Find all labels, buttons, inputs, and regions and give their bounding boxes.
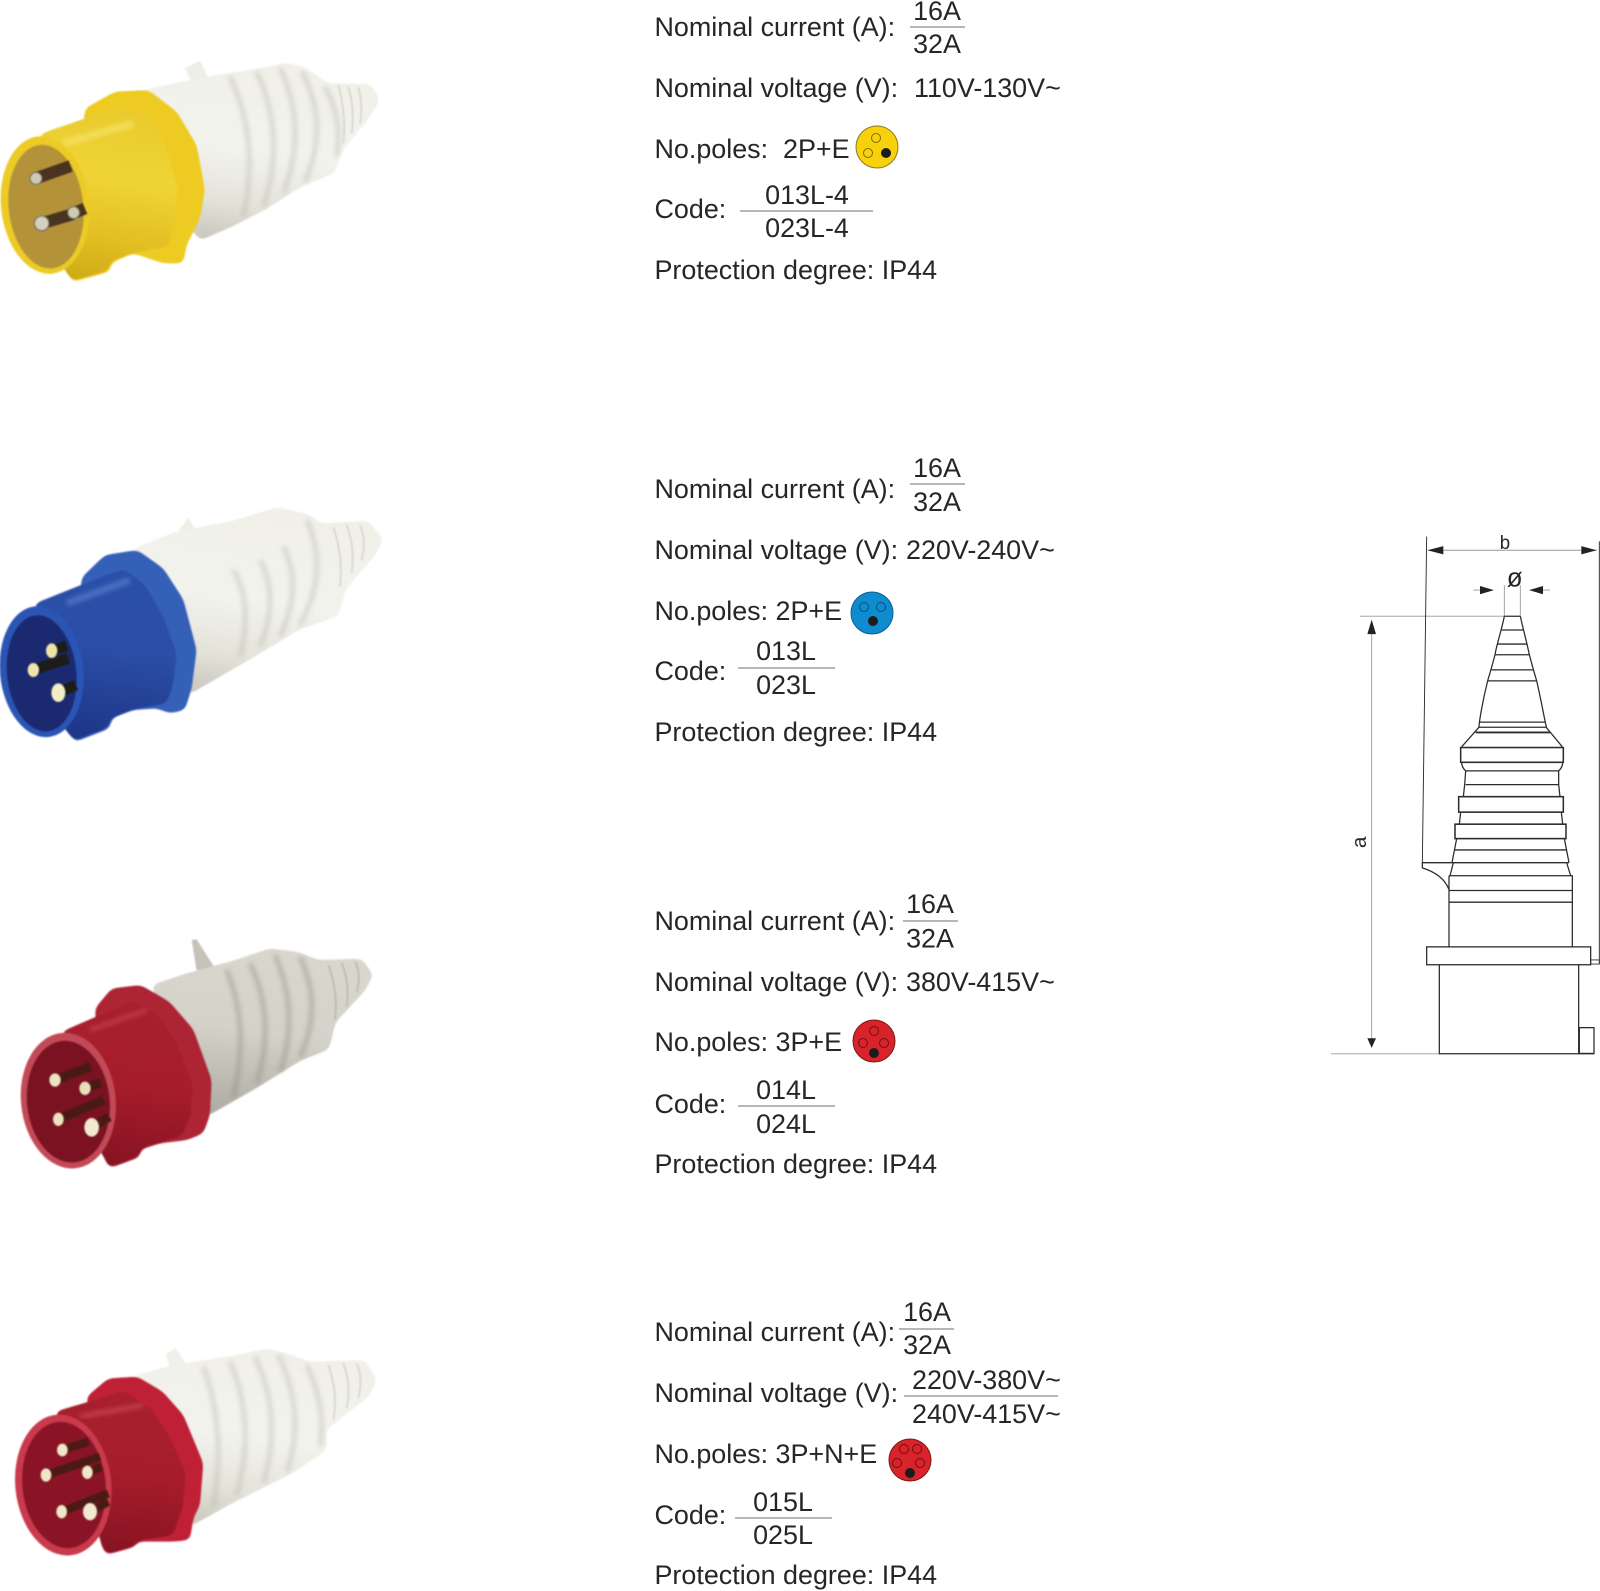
spec block: red 3P+E plug bbox=[654, 889, 1055, 1179]
spec block: blue plug: 023L bbox=[756, 670, 816, 700]
spec block: red 3P+N+E plug: 240V-415V~ bbox=[912, 1399, 1061, 1429]
spec block: blue plug: 2P+E bbox=[776, 596, 842, 626]
spec block: red 3P+N+E plug: 16A bbox=[903, 1297, 951, 1327]
spec block: blue plug: Protection degree: IP44 bbox=[654, 717, 937, 747]
spec block: red 3P+E plug: Code: bbox=[654, 1089, 726, 1119]
spec block: red 3P+N+E plug: Nominal current (A): bbox=[654, 1317, 895, 1347]
icon: yellow socket pin layout bbox=[856, 126, 898, 168]
spec block: yellow plug: Code: bbox=[654, 194, 726, 224]
spec block: yellow plug: Nominal current (A): bbox=[654, 12, 895, 42]
dimension labels: ø bbox=[1507, 562, 1523, 593]
spec block: blue plug: Nominal voltage (V): bbox=[654, 535, 898, 565]
spec block: yellow plug: No.poles: bbox=[654, 134, 768, 164]
plug outline bbox=[1422, 616, 1599, 1054]
photo: yellow plug bbox=[0, 61, 380, 282]
spec block: yellow plug: Nominal voltage (V): bbox=[654, 73, 898, 103]
spec block: blue plug: No.poles: bbox=[654, 596, 768, 626]
photo: red 3P+E plug bbox=[14, 939, 373, 1173]
spec block: red 3P+E plug: 014L bbox=[756, 1075, 816, 1105]
icon: red 3P+E socket pin layout bbox=[853, 1020, 895, 1062]
icon: blue socket pin layout bbox=[851, 592, 893, 634]
spec block: red 3P+E plug: 3P+E bbox=[776, 1027, 842, 1057]
dimension labels: a bbox=[1349, 836, 1371, 848]
spec block: red 3P+E plug: Nominal voltage (V): bbox=[654, 967, 898, 997]
spec block: red 3P+N+E plug: 025L bbox=[753, 1520, 813, 1550]
spec block: blue plug bbox=[654, 453, 1055, 747]
technical dimension drawing bbox=[1331, 533, 1599, 1054]
spec block: red 3P+E plug: 380V-415V~ bbox=[906, 967, 1055, 997]
spec block: red 3P+E plug: Nominal current (A): bbox=[654, 906, 895, 936]
spec block: red 3P+N+E plug: Protection degree: IP44 bbox=[654, 1560, 937, 1590]
spec block: red 3P+N+E plug: Nominal voltage (V): bbox=[654, 1378, 898, 1408]
spec block: blue plug: Code: bbox=[654, 656, 726, 686]
spec block: red 3P+N+E plug: No.poles: bbox=[654, 1439, 768, 1469]
spec block: yellow plug: 32A bbox=[913, 29, 961, 59]
spec block: yellow plug: 023L-4 bbox=[765, 213, 849, 243]
spec block: blue plug: 013L bbox=[756, 636, 816, 666]
spec block: red 3P+N+E plug: Code: bbox=[654, 1500, 726, 1530]
spec block: blue plug: 220V-240V~ bbox=[906, 535, 1055, 565]
spec block: red 3P+N+E plug: 3P+N+E bbox=[776, 1439, 877, 1469]
spec block: blue plug: 16A bbox=[913, 453, 961, 483]
spec block: red 3P+E plug: 32A bbox=[906, 924, 954, 954]
dimension labels bbox=[1349, 533, 1523, 848]
spec block: red 3P+E plug: 024L bbox=[756, 1109, 816, 1139]
photo: blue plug bbox=[0, 507, 383, 742]
spec block: red 3P+N+E plug: 32A bbox=[903, 1330, 951, 1360]
spec block: blue plug: Nominal current (A): bbox=[654, 474, 895, 504]
spec block: red 3P+N+E plug: 015L bbox=[753, 1487, 813, 1517]
dimension lines and arrows bbox=[1331, 536, 1599, 1054]
spec block: red 3P+N+E plug bbox=[654, 1297, 1061, 1590]
spec block: red 3P+E plug: 16A bbox=[906, 889, 954, 919]
spec block: blue plug: 32A bbox=[913, 487, 961, 517]
spec block: yellow plug: 110V-130V~ bbox=[914, 73, 1061, 103]
spec block: red 3P+E plug: No.poles: bbox=[654, 1027, 768, 1057]
spec block: red 3P+N+E plug: 220V-380V~ bbox=[912, 1365, 1061, 1395]
spec block: red 3P+E plug: Protection degree: IP44 bbox=[654, 1149, 937, 1179]
photo: red 3P+N+E plug bbox=[8, 1347, 377, 1560]
spec block: yellow plug bbox=[654, 0, 1061, 285]
spec block: yellow plug: 013L-4 bbox=[765, 180, 849, 210]
icon: red 3P+N+E socket pin layout bbox=[889, 1439, 931, 1481]
spec block: yellow plug: 2P+E bbox=[783, 134, 850, 164]
spec block: yellow plug: Protection degree: IP44 bbox=[654, 255, 937, 285]
dimension labels: b bbox=[1500, 533, 1510, 554]
